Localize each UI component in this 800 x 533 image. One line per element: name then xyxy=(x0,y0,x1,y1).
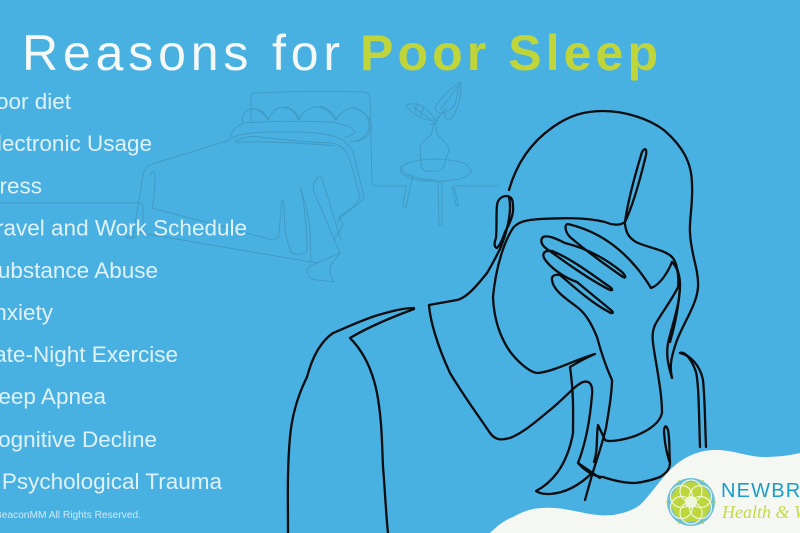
white wave panel xyxy=(490,450,800,533)
hand and fingers xyxy=(541,224,672,500)
list of reasons xyxy=(0,89,247,494)
title xyxy=(22,25,658,81)
logo: Newbridge flower mark xyxy=(666,478,716,526)
illustration: line drawing of person holding head xyxy=(288,111,706,533)
illustration: faded bed and side table xyxy=(0,91,413,282)
list of reasons: Psychological Trauma xyxy=(2,469,222,494)
illustration: faded vase and plant on table xyxy=(400,82,498,226)
title: Poor Sleep xyxy=(360,25,658,81)
title: Reasons for xyxy=(22,25,340,81)
